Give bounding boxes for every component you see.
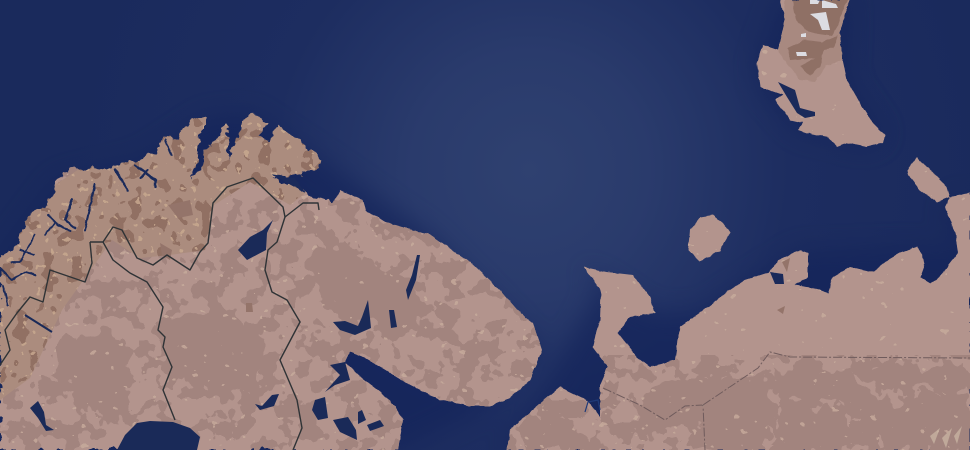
lakes: Kola peninsula bbox=[333, 255, 420, 335]
Novaya Zemlya ice bbox=[796, 0, 838, 56]
Novaya Zemlya lowland shading bbox=[778, 0, 850, 82]
land: Norway, Sweden and Finland bbox=[0, 113, 340, 450]
Novaya Zemlya highlands bbox=[788, 0, 848, 76]
lakes: Karelia bbox=[312, 362, 384, 440]
lighter channels in eastern lowland bbox=[770, 368, 950, 450]
mottled noise: south Russia bbox=[560, 355, 970, 450]
mountain highlights bbox=[0, 122, 318, 394]
borders bbox=[0, 178, 319, 450]
border: Sweden and Finland bbox=[103, 242, 175, 420]
mountain zone bbox=[0, 105, 335, 400]
border: Norway and Russia bbox=[285, 203, 319, 217]
sea: Gulf of Bothnia bbox=[117, 421, 200, 450]
border: Norway and Sweden bbox=[0, 242, 92, 365]
mountain ridges bbox=[0, 118, 320, 383]
lake: Kemijarvi bbox=[255, 394, 279, 410]
lake: northern Sweden bbox=[30, 401, 54, 431]
lakes and inlet: Novaya Zemlya bbox=[778, 82, 815, 118]
mottled noise: west bbox=[0, 166, 540, 450]
inlet: Pechora coast bbox=[770, 272, 784, 284]
border: Finland bbox=[90, 178, 302, 450]
lake: Tornetrask bbox=[25, 315, 52, 332]
lake: Inari bbox=[238, 220, 273, 260]
regional borders: Russia bbox=[603, 352, 970, 450]
land: Kola, Karelia, Russia and islands bbox=[300, 0, 970, 450]
river mouth bbox=[585, 400, 600, 412]
lowland patches bbox=[55, 245, 970, 450]
fjords and inlets bbox=[0, 140, 305, 305]
eastern hills bbox=[930, 426, 962, 448]
highland brown patches bbox=[160, 200, 876, 314]
